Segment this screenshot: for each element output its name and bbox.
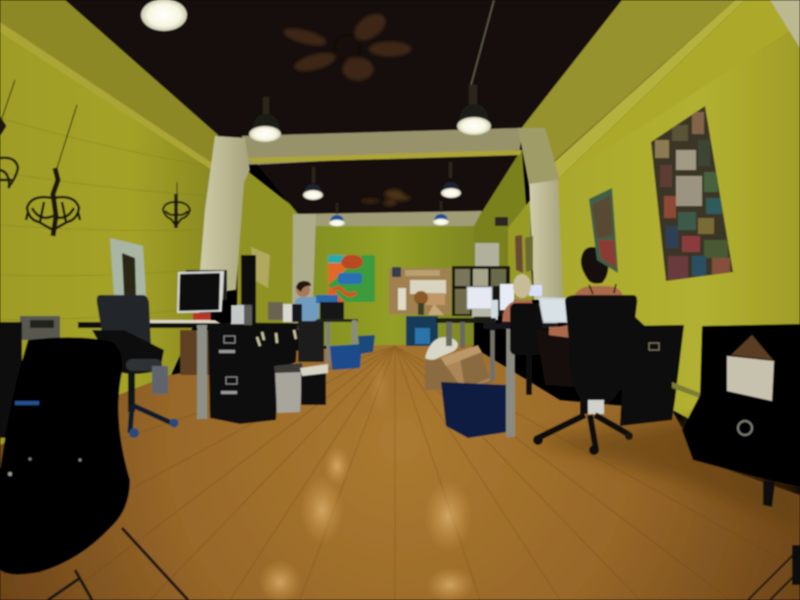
right side wall section: [508, 200, 532, 300]
foreground cables right: [748, 548, 800, 600]
tall black object on desk: [241, 255, 256, 323]
cork notice board: [389, 267, 451, 315]
colorful back wall painting: [328, 255, 375, 302]
wall chandelier left: [0, 80, 18, 188]
back wall: [312, 226, 474, 346]
map poster: [251, 247, 270, 288]
back room pendant lamps: [303, 162, 461, 226]
white plastic bag: [425, 337, 458, 360]
right ceiling beam: [520, 0, 800, 182]
dark object at right edge: [792, 545, 800, 585]
black desk chair: [92, 295, 178, 438]
desk items: [231, 302, 292, 325]
cardboard box: [425, 345, 494, 390]
folding screen: [452, 266, 510, 316]
large abstract painting: [651, 106, 733, 281]
blue recycling bin: [441, 382, 508, 438]
floor: [0, 345, 800, 600]
back left pillar: [292, 214, 316, 330]
woman at laptop: [549, 247, 628, 339]
ceiling fan, foreground: [281, 8, 412, 81]
laptop foreground: [538, 297, 573, 323]
mid desk computers: [436, 284, 542, 348]
foreground desk: [483, 323, 558, 437]
foreground black chair: [0, 337, 188, 600]
small abstract painting: [589, 188, 618, 273]
projector on wall: [495, 217, 508, 226]
left wall block lines: [0, 118, 205, 320]
left column: [198, 136, 250, 295]
back left side wall: [236, 165, 300, 340]
back right round column: [475, 243, 499, 283]
blue bins back: [330, 335, 375, 370]
foreground office chair: [533, 295, 647, 455]
monitor on left desk: [177, 270, 227, 320]
black bin with white bag: [300, 364, 328, 405]
poster leaning on left wall: [110, 238, 146, 296]
right filing cabinet: [620, 325, 684, 426]
floor light reflections: [258, 355, 474, 600]
back ceiling beam: [298, 211, 482, 226]
wall chandelier right: [163, 182, 190, 228]
blue back cabinet: [406, 316, 438, 346]
plant in vase: [414, 291, 428, 315]
right wall: [555, 25, 800, 440]
narrow paintings: [515, 235, 533, 273]
back right side wall: [470, 150, 534, 300]
back room ceiling: [253, 155, 518, 214]
main arch beam: [242, 128, 522, 165]
left black cabinet: [0, 322, 22, 438]
floor shadow: [530, 420, 800, 530]
dark area under desk: [536, 330, 640, 392]
right column: [518, 128, 563, 300]
man at desk: [295, 281, 324, 362]
floor planks: [0, 346, 800, 600]
laptop and chair by man: [290, 295, 344, 322]
back desk: [300, 319, 358, 364]
main left desk: [78, 320, 296, 419]
ceiling foreground: [60, 0, 625, 142]
wall chandelier centre: [26, 105, 80, 236]
large black cabinet right: [682, 324, 800, 507]
grey computer tower: [152, 366, 168, 394]
filing cabinet: [208, 323, 298, 424]
lamp foreground top: [141, 0, 187, 31]
pendant lamp left: [249, 97, 281, 142]
left ceiling beam: [0, 0, 218, 172]
baseboard right: [672, 382, 700, 398]
blonde woman: [502, 274, 542, 395]
pendant lamp right: [457, 0, 494, 135]
back room fan: [360, 189, 411, 206]
printer: [20, 316, 60, 340]
left wall: [0, 30, 215, 445]
wastebin grey: [274, 363, 303, 413]
